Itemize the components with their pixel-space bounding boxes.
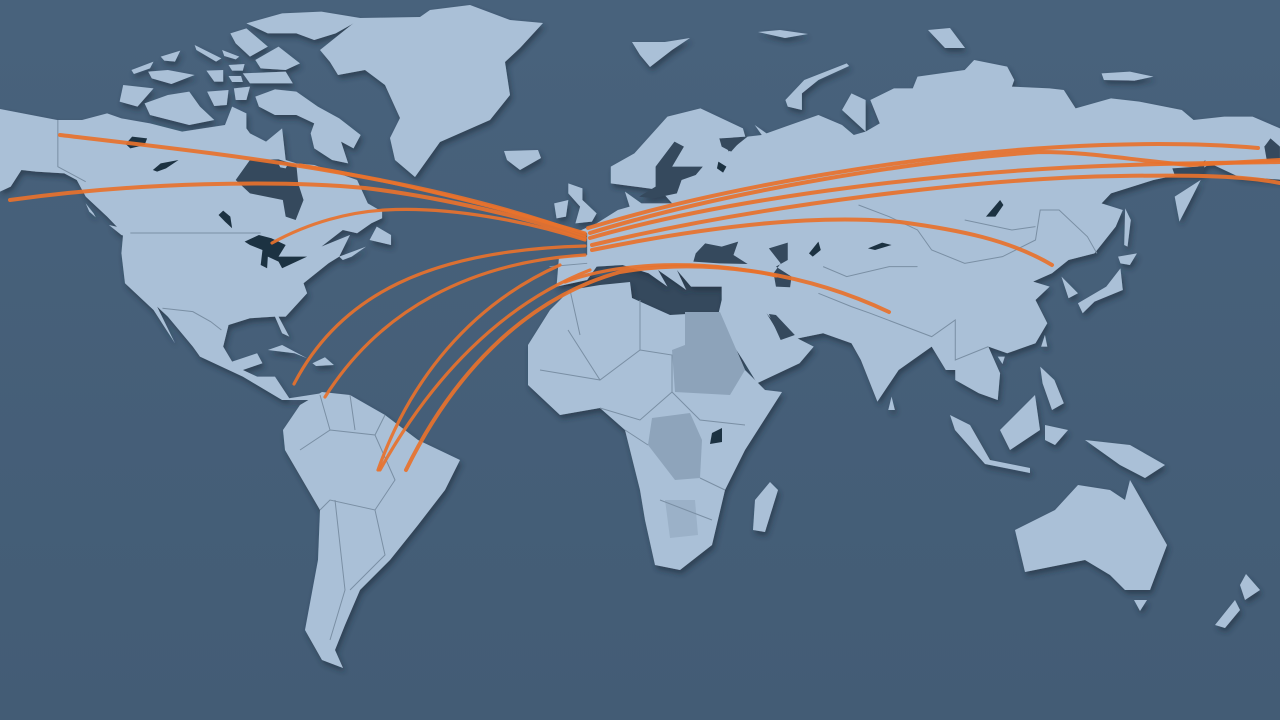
land: Cornwallis Island: [229, 76, 243, 82]
region: darker southern Africa: [665, 500, 698, 538]
land: Borneo: [1000, 395, 1040, 450]
lake: Great Bear Lake: [126, 137, 147, 148]
arc: Brazil to Spain: [378, 265, 560, 470]
lake: Lake Ladoga: [717, 162, 726, 173]
land: Baffin Island: [255, 89, 361, 163]
borders: South America: [300, 395, 395, 640]
land: Hokkaido: [1118, 253, 1137, 265]
arc: Hudson Bay to Europe: [300, 165, 585, 233]
land: Philippines: [1040, 367, 1064, 410]
land: Boothia: [232, 107, 246, 128]
land: New Zealand north: [1240, 574, 1260, 600]
lake: Balkhash: [868, 243, 892, 250]
land: Novaya Zemlya: [785, 63, 849, 110]
land: Greenland: [320, 5, 543, 177]
land: Tasmania: [1134, 600, 1147, 611]
land: South America: [283, 392, 460, 668]
land: New Guinea: [1085, 440, 1165, 478]
arc: Central America to Europe: [294, 246, 585, 384]
borders: Africa: [540, 290, 745, 520]
land: Victoria Island: [145, 92, 214, 125]
lake: Great Slave Lake: [153, 160, 179, 172]
arc: Spain to Caspian: [565, 265, 776, 282]
sea: Hudson Bay: [236, 159, 304, 220]
lake: Great Lakes: [245, 235, 307, 268]
sea: White Sea: [719, 138, 743, 152]
lake: Baikal: [986, 200, 1003, 217]
land: James Bay island: [279, 164, 287, 168]
land: Haida Gwaii: [86, 203, 96, 217]
land: Africa: [528, 282, 782, 570]
arc: Europe to Chukotka: [588, 144, 1258, 228]
land: Bylot Island: [255, 47, 300, 70]
borders: Asia: [549, 205, 1097, 360]
land: Australia: [1015, 480, 1167, 590]
land: Devon Island: [243, 72, 293, 83]
land: Bathurst Island: [206, 70, 223, 82]
land: Ellesmere Island: [246, 12, 362, 40]
land: Cuba: [268, 345, 307, 358]
route arcs: [10, 135, 1280, 470]
land: Madagascar: [753, 482, 778, 532]
sea: Chukotka bay: [1264, 138, 1280, 162]
land: Sakhalin: [1124, 208, 1131, 247]
sea: Caspian Sea: [769, 243, 792, 287]
land: Honshu: [1078, 268, 1123, 313]
land: Prince of Wales Island: [234, 87, 250, 100]
sea: Baltic Sea: [639, 142, 703, 198]
land: Korea: [1061, 277, 1078, 298]
lake: Lake Victoria: [710, 428, 722, 444]
land: Borden Island: [161, 51, 180, 62]
sea: Mediterranean: [560, 270, 725, 320]
land: North America: [0, 12, 391, 400]
land: New Zealand south: [1215, 600, 1240, 628]
arc: Europe to Korea: [592, 219, 1052, 265]
land: Meighen Island: [222, 50, 239, 59]
sea: Persian Gulf: [769, 314, 795, 340]
land: Hispaniola: [312, 357, 334, 366]
land: Franz Josef Land: [758, 30, 808, 38]
land: Kamchatka: [1175, 180, 1201, 222]
arc: Brazil to Mediterranean: [380, 270, 590, 470]
land: Amund Ringnes Island: [229, 64, 245, 71]
land: New Siberian Islands: [1102, 72, 1153, 81]
sea: Okhotsk shore: [1172, 160, 1205, 175]
border: Canada and USA: [58, 120, 261, 233]
land: Melville Island: [148, 70, 195, 84]
region: darker Congo: [648, 413, 702, 480]
land: Newfoundland: [370, 227, 391, 245]
arc: Europe to Russian Far East south: [592, 176, 1280, 245]
land: Eurasia: [549, 60, 1280, 410]
arc: Great Lakes to Europe: [272, 209, 585, 243]
lake: Aral Sea: [809, 242, 821, 257]
arc: Brazil to India: [406, 266, 889, 470]
sea: Black Sea: [693, 242, 748, 264]
land: Somerset Island: [207, 90, 229, 106]
region: darker Egypt and Sudan: [672, 312, 745, 395]
land: Cape Breton: [339, 247, 366, 260]
lake: Lake Winnipeg: [219, 211, 232, 228]
land: Prince Patrick Island: [131, 62, 154, 74]
land: Ireland: [554, 200, 568, 218]
land: Axel Heiberg Island: [230, 28, 268, 57]
arc: Pacific to Europe: [10, 184, 585, 238]
land: Taiwan: [1041, 335, 1047, 347]
land: Iceland: [504, 150, 541, 170]
land: Sri Lanka: [888, 397, 895, 410]
land: Svalbard: [632, 38, 690, 67]
land: Sulawesi: [1045, 425, 1068, 445]
land: Vancouver Island: [109, 225, 131, 238]
land: Ellef Ringnes Island: [195, 45, 221, 62]
border: Mexico: [162, 308, 221, 330]
arc: Caribbean to Europe: [325, 255, 585, 397]
arc: Europe to Russian Far East middle: [590, 162, 1280, 238]
land: Hainan: [998, 357, 1005, 364]
arc: Alaska to Europe: [60, 135, 585, 235]
land: Banks Island: [120, 85, 154, 107]
land: Sumatra and Java: [950, 415, 1030, 473]
land: Severnaya Zemlya: [928, 28, 965, 48]
arc: Europe to Okhotsk: [590, 152, 1280, 233]
land: Great Britain: [568, 183, 597, 223]
